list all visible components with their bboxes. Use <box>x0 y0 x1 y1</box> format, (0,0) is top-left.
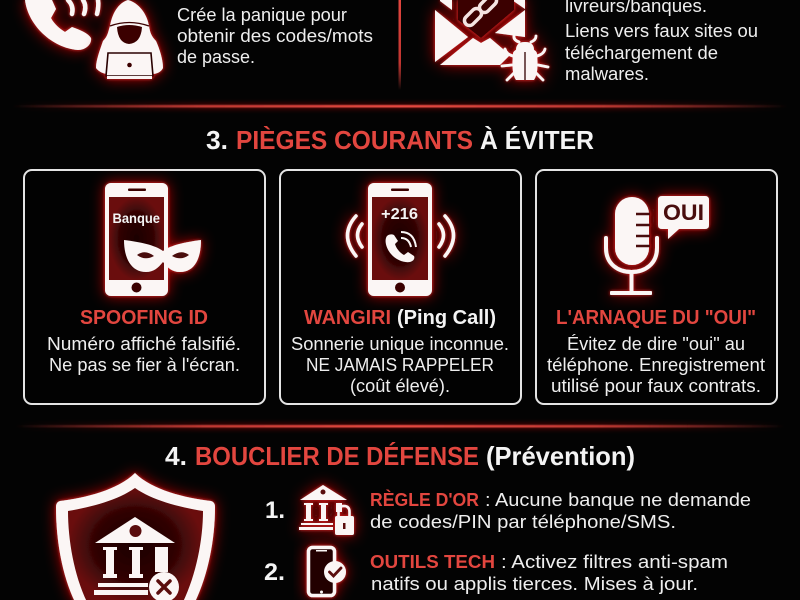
text: phishing description: Liens vers faux sites ou <box>565 21 758 41</box>
panel: spoofing ID card <box>24 170 265 404</box>
heading: section 3: À ÉVITER <box>480 125 594 155</box>
icon: phone with check <box>308 548 346 596</box>
icon: hooded hacker with laptop <box>96 0 163 79</box>
heading: section 4: BOUCLIER DE DÉFENSE <box>195 441 479 471</box>
panel: vishing (top left) <box>25 0 373 79</box>
card text: utilisé pour faux contrats. <box>551 376 761 396</box>
icon: bank with padlock <box>299 485 354 535</box>
card text <box>547 334 765 396</box>
item: règle d'or <box>265 485 751 535</box>
text: phishing description <box>565 0 758 84</box>
card title: (Ping Call) <box>397 307 496 329</box>
icon: phone with +216 call <box>348 183 454 296</box>
text: vishing description: Crée la panique pour <box>177 5 347 25</box>
number 2: 2. <box>264 559 285 586</box>
text: outils tech: natifs ou applis tierces. Mises à jour. <box>371 573 698 594</box>
text: outils tech: : Activez filtres anti-spam <box>501 551 728 572</box>
card text <box>47 334 241 375</box>
heading: section 3: PIÈGES COURANTS <box>236 125 473 155</box>
vertical divider <box>398 0 401 90</box>
text: vishing description: obtenir des codes/mots <box>177 26 373 46</box>
icon: shield with bank <box>56 473 215 600</box>
card title: SPOOFING ID <box>80 307 208 329</box>
text: phishing description: téléchargement de <box>565 43 718 63</box>
text: outils tech <box>370 551 728 594</box>
card text: Numéro affiché falsifié. <box>47 334 241 354</box>
divider <box>12 105 788 108</box>
heading: section 4 <box>165 441 635 471</box>
panel: phishing (top right) <box>435 0 758 84</box>
card text: (coût élevé). <box>350 376 450 396</box>
card title: WANGIRI <box>304 307 391 329</box>
text: règle d'or: de codes/PIN par téléphone/SMS. <box>370 511 676 532</box>
card text <box>291 334 509 396</box>
card text: Ne pas se fier à l'écran. <box>49 355 240 375</box>
card title <box>304 307 496 329</box>
text: vishing description <box>177 5 373 67</box>
panel: wangiri card <box>280 170 521 404</box>
card title: L'ARNAQUE DU "OUI" <box>556 307 756 329</box>
text: vishing description: de passe. <box>177 47 255 67</box>
text: règle d'or <box>370 489 751 532</box>
text: phishing description: malwares. <box>565 64 649 84</box>
card text: NE JAMAIS RAPPELER <box>306 355 494 375</box>
icon: microphone with speech bubble <box>606 196 709 295</box>
icon: envelope with link and bug <box>435 0 548 80</box>
icon: phone with mask <box>105 183 201 296</box>
card text: Sonnerie unique inconnue. <box>291 334 509 354</box>
number 1: 1. <box>265 497 285 524</box>
panel: arnaque du oui card <box>536 170 777 404</box>
icon: microphone with speech bubble: OUI <box>663 200 704 225</box>
divider <box>15 425 785 428</box>
icon: phone with mask: Banque <box>112 210 160 226</box>
card text: téléphone. Enregistrement <box>547 355 765 375</box>
text: règle d'or: RÈGLE D'OR <box>370 489 479 510</box>
heading: section 3 <box>206 125 594 155</box>
heading: section 4: 4. <box>165 441 187 471</box>
icon: phone with +216 call: +216 <box>381 206 418 223</box>
text: outils tech: OUTILS TECH <box>370 551 495 572</box>
heading: section 4: (Prévention) <box>486 441 635 471</box>
card text: Évitez de dire "oui" au <box>567 334 745 354</box>
heading: section 3: 3. <box>206 125 228 155</box>
icon: ringing telephone <box>25 0 98 50</box>
text: règle d'or: : Aucune banque ne demande <box>485 489 751 510</box>
item: outils tech <box>264 548 728 596</box>
